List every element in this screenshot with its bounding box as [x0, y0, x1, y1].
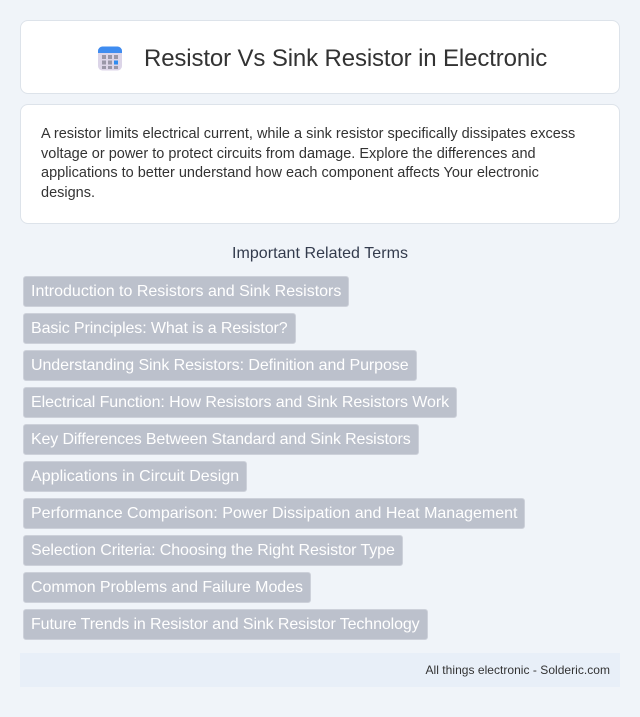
intro text	[41, 126, 575, 201]
intro text: applications to better understand how each component affects Your electronic	[41, 165, 539, 181]
term 1: Introduction to Resistors and Sink Resistors	[31, 283, 341, 300]
term 10	[23, 609, 428, 640]
term 2	[23, 313, 296, 344]
footer credit: All things electronic - Solderic.com	[426, 663, 610, 677]
term 5: Key Differences Between Standard and Sink Resistors	[31, 431, 411, 448]
term 6	[23, 461, 247, 492]
term 1	[23, 276, 349, 307]
footer bar	[20, 653, 620, 687]
intro panel	[20, 104, 620, 224]
term 8: Selection Criteria: Choosing the Right Resistor Type	[31, 542, 395, 559]
intro text: A resistor limits electrical current, while a sink resistor specifically dissipates excess	[41, 126, 575, 142]
term 10: Future Trends in Resistor and Sink Resistor Technology	[31, 616, 420, 633]
term 5	[23, 424, 419, 455]
title: Resistor Vs Sink Resistor in Electronic	[144, 45, 547, 72]
term 3	[23, 350, 417, 381]
intro text: voltage or power to protect circuits from damage. Explore the differences and	[41, 146, 536, 162]
term 3: Understanding Sink Resistors: Definition and Purpose	[31, 357, 409, 374]
icon: calendar	[98, 46, 122, 70]
section heading: Important Related Terms	[232, 245, 408, 262]
term 4: Electrical Function: How Resistors and Sink Resistors Work	[31, 394, 449, 411]
term 4	[23, 387, 457, 418]
term 6: Applications in Circuit Design	[31, 468, 239, 485]
header panel	[20, 20, 620, 94]
term 9: Common Problems and Failure Modes	[31, 579, 303, 596]
term 7: Performance Comparison: Power Dissipation and Heat Management	[31, 505, 517, 522]
term 2: Basic Principles: What is a Resistor?	[31, 320, 288, 337]
term list	[23, 276, 525, 640]
term 7	[23, 498, 525, 529]
term 8	[23, 535, 403, 566]
term 9	[23, 572, 311, 603]
intro text: designs.	[41, 185, 95, 201]
